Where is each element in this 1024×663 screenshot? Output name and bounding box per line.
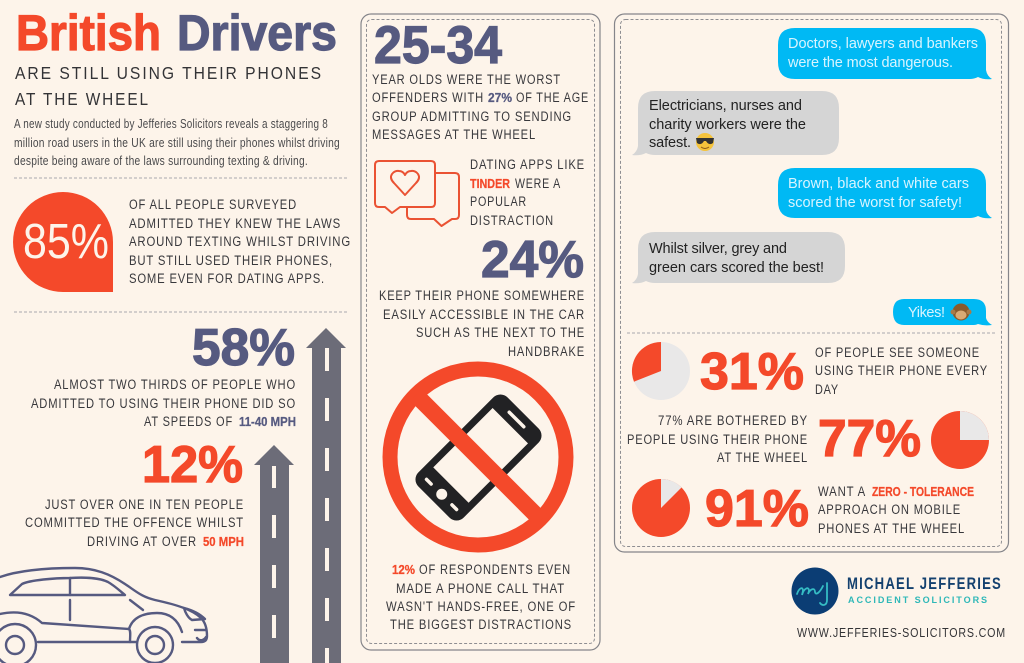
logo: ACCIDENT SOLICITORS [848, 595, 989, 606]
road arrow: short [254, 445, 294, 663]
text: bothered: AT THE WHEEL [717, 450, 808, 465]
stat: 85 percent teardrop [13, 192, 113, 292]
subtitle: ARE STILL USING THEIR PHONES [15, 63, 323, 83]
title: British [16, 5, 161, 61]
text: tinder: DATING APPS LIKE [470, 157, 585, 172]
pie: 31 percent [632, 342, 690, 400]
text: laws awareness: ADMITTED THEY KNEW THE LAWS [129, 216, 341, 231]
text: handbrake: SUCH AS THE NEXT TO THE [416, 325, 585, 340]
stat: 58 percent: 58% [192, 319, 295, 377]
text: 50 mph: DRIVING AT OVER [87, 534, 197, 549]
message: electricians: safest. [649, 135, 691, 151]
text: handbrake: EASILY ACCESSIBLE IN THE CAR [383, 307, 585, 322]
text: bothered: PEOPLE USING THEIR PHONE [627, 432, 808, 447]
text: 11-40 mph: AT SPEEDS OF [144, 414, 233, 429]
message: doctors: Doctors, lawyers and bankers [788, 36, 978, 52]
text: zero tolerance: APPROACH ON MOBILE [818, 502, 961, 517]
text: hands-free calls: WASN'T HANDS-FREE, ONE OF [386, 599, 576, 614]
text: laws awareness: OF ALL PEOPLE SURVEYED [129, 197, 297, 212]
message: brown cars: Brown, black and white cars [788, 176, 969, 192]
message: electricians: Electricians, nurses and [649, 98, 802, 114]
stat: 77 percent: 77% [818, 410, 921, 468]
message: brown cars: scored the worst for safety! [788, 195, 962, 211]
text: laws awareness: BUT STILL USED THEIR PHONES, [129, 253, 333, 268]
text: hands-free calls: MADE A PHONE CALL THAT [396, 581, 565, 596]
title: Drivers [177, 5, 337, 61]
text: 11-40 mph: 11-40 MPH [239, 414, 296, 429]
text: worst offenders: MESSAGES AT THE WHEEL [372, 127, 536, 142]
intro text: A new study conducted by Jefferies Solicitors reveals a staggering 8 [14, 117, 328, 131]
text: worst offenders: YEAR OLDS WERE THE WORST [372, 72, 561, 87]
message: electricians: charity workers were the [649, 117, 806, 133]
text: hands-free calls: THE BIGGEST DISTRACTIONS [390, 617, 572, 632]
text: worst offenders: 27% [488, 90, 512, 105]
message: silver cars: green cars scored the best! [649, 260, 824, 276]
message: yikes: Yikes! [908, 305, 945, 321]
text: bothered: 77% ARE BOTHERED BY [658, 413, 808, 428]
message: electricians [632, 91, 839, 155]
text: see someone: DAY [815, 382, 839, 397]
panel: age and distractions [361, 14, 600, 650]
text: tinder: TINDER [470, 176, 511, 191]
text: handbrake: KEEP THEIR PHONE SOMEWHERE [379, 288, 585, 303]
road arrow: tall [306, 328, 346, 663]
message: silver cars: Whilst silver, grey and [649, 241, 787, 257]
intro text [14, 117, 340, 168]
text: worst offenders: OFFENDERS WITH [372, 90, 484, 105]
logo [792, 568, 1002, 614]
pie: 77 percent [931, 411, 989, 469]
text: see someone: USING THEIR PHONE EVERY [815, 363, 988, 378]
text: bothered [627, 413, 808, 465]
stat: 24 percent: 24% [481, 231, 584, 289]
text: zero tolerance: ZERO - TOLERANCE [872, 484, 974, 499]
stat: 91 percent: 91% [705, 480, 809, 538]
text: 11-40 mph: ADMITTED TO USING THEIR PHONE DID SO [31, 396, 296, 411]
icon: car [0, 568, 207, 663]
text: zero tolerance [818, 484, 974, 536]
text: tinder: POPULAR [470, 194, 527, 209]
panel: messages and pies [614, 14, 1008, 552]
text: 11-40 mph [31, 377, 296, 429]
message: doctors: were the most dangerous. [787, 55, 953, 71]
pie: 91 percent [632, 479, 690, 537]
message: silver cars [632, 232, 845, 283]
text: tinder [470, 157, 585, 228]
stat: 85 percent teardrop: 85% [23, 215, 109, 269]
message: brown cars [778, 168, 992, 218]
icon: dating chat bubbles [375, 161, 459, 226]
text: handbrake: HANDBRAKE [508, 344, 585, 359]
text: worst offenders: GROUP ADMITTING TO SENDING [372, 109, 572, 124]
text: 50 mph: JUST OVER ONE IN TEN PEOPLE [45, 497, 244, 512]
intro text: million road users in the UK are still using their phones whilst driving [14, 136, 340, 150]
text: hands-free calls: OF RESPONDENTS EVEN [419, 562, 571, 577]
message: yikes [893, 299, 992, 325]
icon: monkey emoji [950, 304, 972, 320]
text: worst offenders: OF THE AGE [516, 90, 589, 105]
text: zero tolerance: PHONES AT THE WHEEL [818, 521, 965, 536]
subtitle [15, 63, 323, 109]
title [16, 5, 337, 61]
intro text: despite being aware of the laws surrounding texting & driving. [14, 154, 308, 168]
text: tinder: WERE A [515, 176, 561, 191]
text: 50 mph: COMMITTED THE OFFENCE WHILST [25, 515, 244, 530]
text: 50 mph: 50 MPH [203, 534, 244, 549]
text: laws awareness: SOME EVEN FOR DATING APPS. [129, 271, 325, 286]
icon: no phone sign [390, 369, 566, 545]
text: handbrake [379, 288, 585, 359]
text: see someone: OF PEOPLE SEE SOMEONE [815, 345, 980, 360]
text: see someone [815, 345, 988, 397]
text: hands-free calls: 12% [392, 562, 415, 577]
text: laws awareness [129, 197, 351, 286]
text: zero tolerance: WANT A [818, 484, 866, 499]
text: hands-free calls [386, 562, 576, 632]
text: 50 mph [25, 497, 244, 549]
stat: 12 percent: 12% [142, 436, 243, 494]
stat: 25-34: 25-34 [374, 16, 502, 75]
text: 11-40 mph: ALMOST TWO THIRDS OF PEOPLE WHO [54, 377, 296, 392]
text: tinder: DISTRACTION [470, 213, 554, 228]
icon: sunglasses emoji [696, 133, 714, 151]
text: laws awareness: AROUND TEXTING WHILST DRIVING [129, 234, 351, 249]
message: doctors [778, 28, 992, 79]
text: worst offenders [372, 72, 589, 142]
stat: 31 percent: 31% [700, 343, 804, 401]
subtitle: AT THE WHEEL [15, 89, 150, 109]
